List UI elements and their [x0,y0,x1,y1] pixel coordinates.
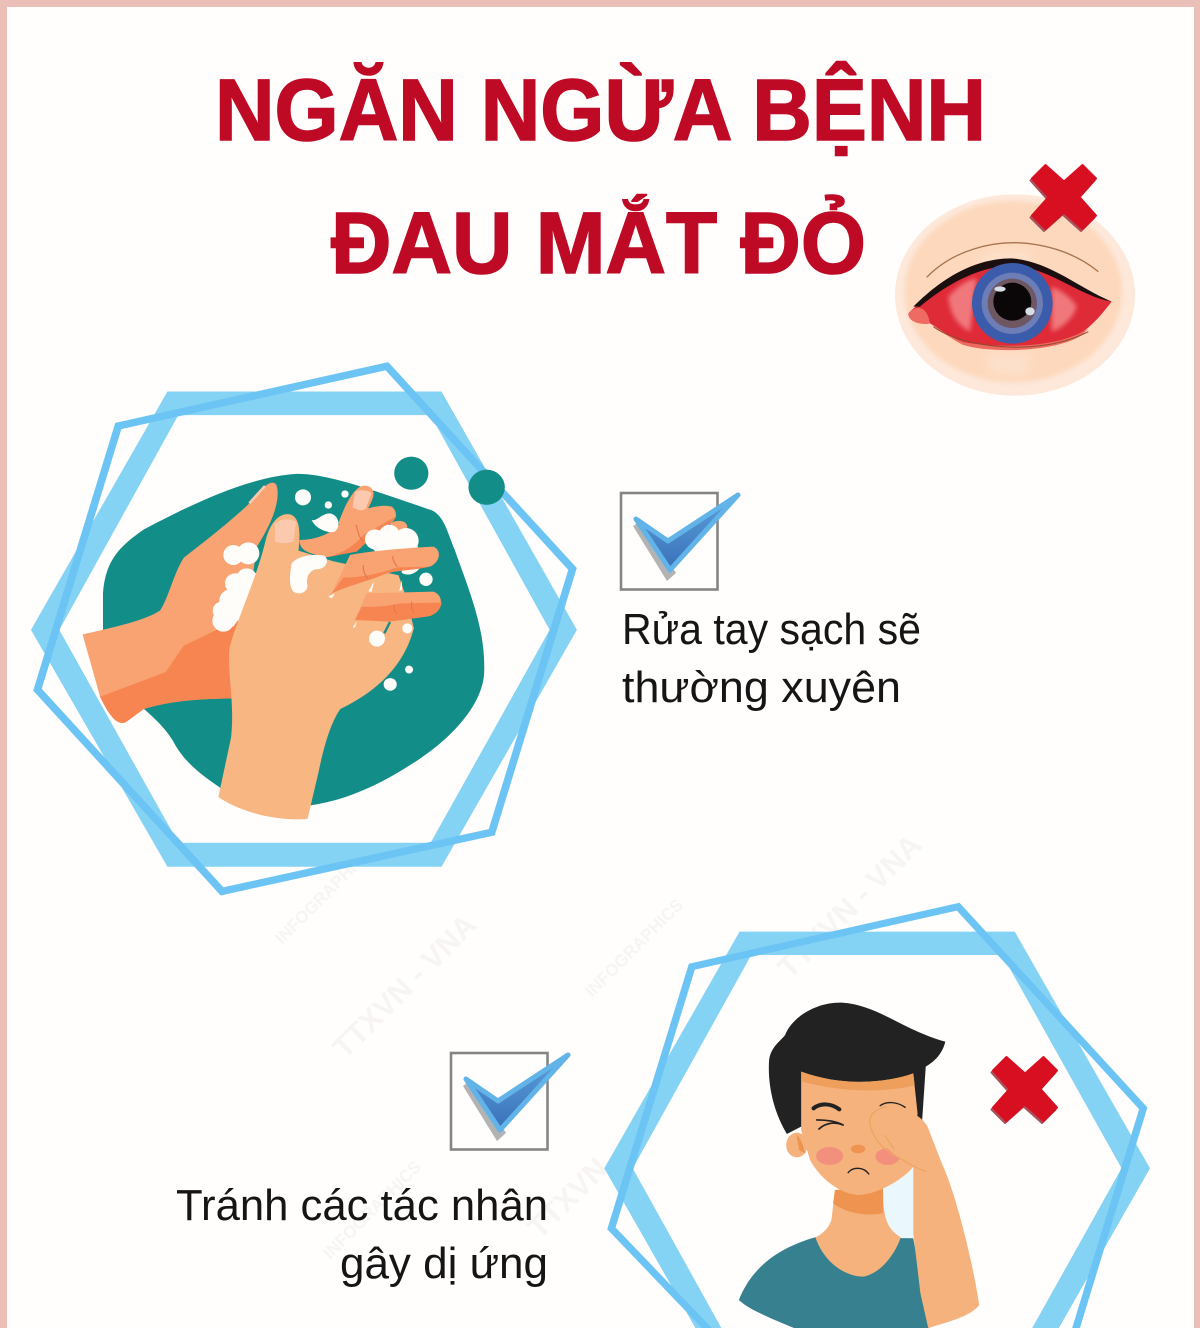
interlaced fingers and foam [275,486,442,672]
neck [815,1190,901,1277]
text block: avoid allergens: Tránh các tác nhân [176,1181,548,1230]
face [801,1072,918,1195]
ear [786,1133,808,1157]
checkbox icon 1 [621,493,738,590]
icon: red eye [895,194,1135,396]
text block: wash hands: thường xuyên [622,663,901,712]
arm and fist [870,1107,979,1328]
watermarks: INFOGRAPHICS [271,842,377,948]
panel: man rubbing eye illustration [604,907,1150,1328]
checkbox icon 2 [451,1053,568,1150]
panel: hand washing illustration [31,366,577,891]
text block: avoid allergens: gây dị ứng [340,1239,548,1288]
thin hexagon frame [611,907,1143,1328]
hair [769,1003,945,1134]
watermarks: INFOGRAPHICS [581,895,687,1001]
thick hexagon frame [604,932,1150,1328]
front hand [218,514,414,819]
foam on back hand [212,486,265,632]
title: ĐAU MẮT ĐỎ [331,195,866,292]
icon: red cross above eye [1030,165,1096,231]
frames, blob and back hand [31,366,577,891]
text block: wash hands [622,605,921,712]
watermarks: TTXVN [522,1152,614,1245]
watermarks: TTXVN - VNA [327,908,483,1065]
icon: red cross beside man [992,1057,1057,1123]
title [215,62,986,292]
outer bubbles [384,666,413,691]
eyes and mouth [814,1103,905,1174]
watermarks: TTXVN - VNA [772,828,928,985]
light patch behind neck [883,1160,913,1240]
text block: wash hands: Rửa tay sạch sẽ [622,605,921,654]
shirt [739,1237,929,1328]
watermarks [271,828,928,1263]
text block: avoid allergens [176,1181,548,1288]
title: NGĂN NGỪA BỆNH [215,62,986,159]
fist outline [870,1107,927,1172]
cheeks and nose [816,1145,900,1165]
watermarks: INFOGRAPHICS [319,1157,425,1263]
